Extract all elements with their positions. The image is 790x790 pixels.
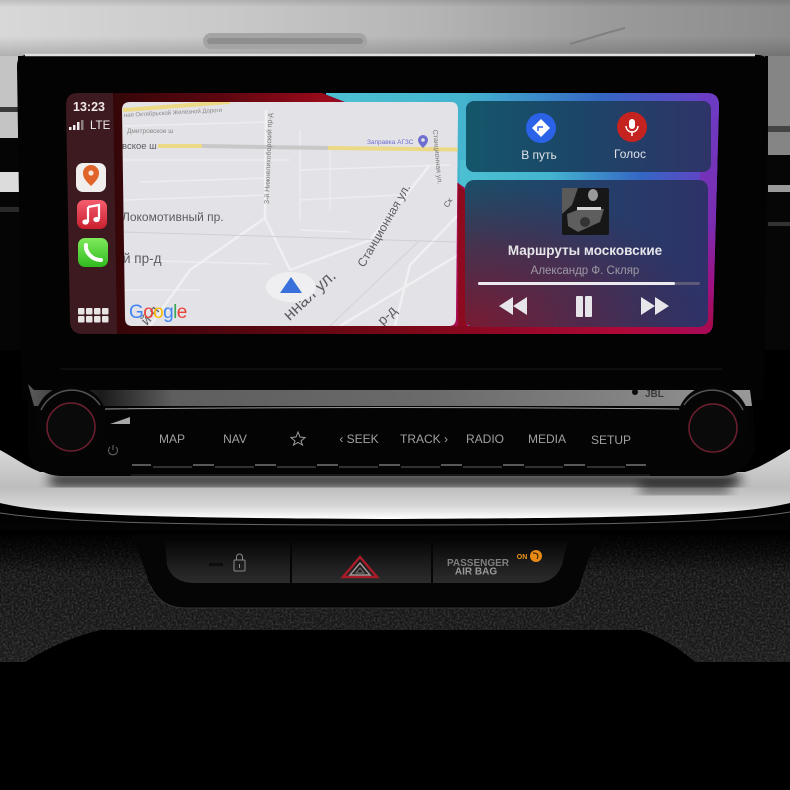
indicator slot <box>209 563 223 566</box>
playback controls <box>499 296 669 317</box>
background: side dashboard left <box>0 56 22 350</box>
album art <box>562 188 609 235</box>
sidebar <box>66 93 117 334</box>
label: directions: В путь <box>521 148 557 162</box>
map labels: Ск <box>442 196 455 209</box>
panel: now playing <box>465 180 708 327</box>
chrome trim strip <box>0 449 790 525</box>
google logo: Google <box>129 302 187 323</box>
passenger airbag label: PASSENGER <box>447 558 510 569</box>
track title: Маршруты московские <box>508 243 663 258</box>
background: side dashboard right <box>765 56 790 350</box>
icon: map pin <box>418 135 428 148</box>
signal status: LTE <box>90 120 111 132</box>
progress bar <box>478 282 700 285</box>
speaker grille <box>203 33 367 49</box>
map highway <box>123 102 458 150</box>
button labels: MAP <box>159 432 185 446</box>
JBL mark <box>632 389 664 400</box>
button labels: RADIO <box>466 432 504 446</box>
map labels: Локомотивный пр. <box>122 210 224 224</box>
passenger airbag label: AIR BAG <box>455 566 497 578</box>
background: leather lower dash <box>0 505 790 663</box>
switch cluster <box>130 535 600 608</box>
icon: hazard triangle <box>343 557 377 577</box>
signal status <box>69 120 111 132</box>
button labels: SETUP <box>591 433 631 447</box>
button labels: NAV <box>223 432 247 446</box>
icon: music app <box>77 200 107 229</box>
knob: right tune <box>677 385 749 457</box>
map labels: ная Октябрьской Железной Дороги <box>124 107 222 119</box>
map labels <box>122 107 455 328</box>
knob: left volume <box>35 385 107 457</box>
button labels <box>159 432 631 447</box>
screen wallpaper <box>113 93 719 335</box>
control panel <box>28 384 755 476</box>
icon: navigation arrow <box>266 272 316 302</box>
button separators <box>132 465 646 467</box>
map labels: й пр-д <box>123 251 162 266</box>
JBL mark: JBL <box>645 389 664 400</box>
background: dark bottom <box>0 630 790 790</box>
icon: power <box>108 445 117 455</box>
button labels: TRACK › <box>400 432 448 446</box>
background: upper dashboard <box>0 0 790 60</box>
icon: directions button <box>526 113 556 143</box>
clock: 13:23 <box>73 100 105 114</box>
airbag on indicator <box>517 550 542 562</box>
airbag on indicator: ON <box>517 554 527 561</box>
icon: phone app <box>78 238 108 267</box>
icon: lock <box>234 554 245 571</box>
map labels: вское ш <box>122 141 157 152</box>
map labels: нная ул. <box>279 266 340 324</box>
map roads <box>123 110 458 326</box>
map labels: Заправка АГЗС <box>367 139 414 146</box>
icon: voice button <box>617 112 647 142</box>
map labels: Дмитровское ш <box>127 128 174 135</box>
map labels: й-п. <box>137 299 165 328</box>
panel: quick actions <box>466 101 711 172</box>
icon: volume wedge <box>110 417 130 424</box>
map labels: 3-й Нижнелихоборский пр-д <box>263 113 274 204</box>
map panel <box>120 100 460 328</box>
label: voice: Голос <box>614 147 646 161</box>
screen <box>66 93 719 335</box>
button labels: MEDIA <box>528 432 566 446</box>
passenger airbag label <box>447 558 510 578</box>
map labels: Станционная ул. <box>431 130 443 185</box>
head unit bezel <box>17 55 768 400</box>
icon: favourite star <box>291 432 305 445</box>
track artist: Александр Ф. Скляр <box>531 265 639 277</box>
icon: maps app <box>76 163 106 192</box>
button labels: ‹ SEEK <box>339 432 379 446</box>
map labels: р-д <box>374 302 400 328</box>
icon: app grid <box>78 308 108 322</box>
map labels: Станционная ул. <box>354 182 413 270</box>
